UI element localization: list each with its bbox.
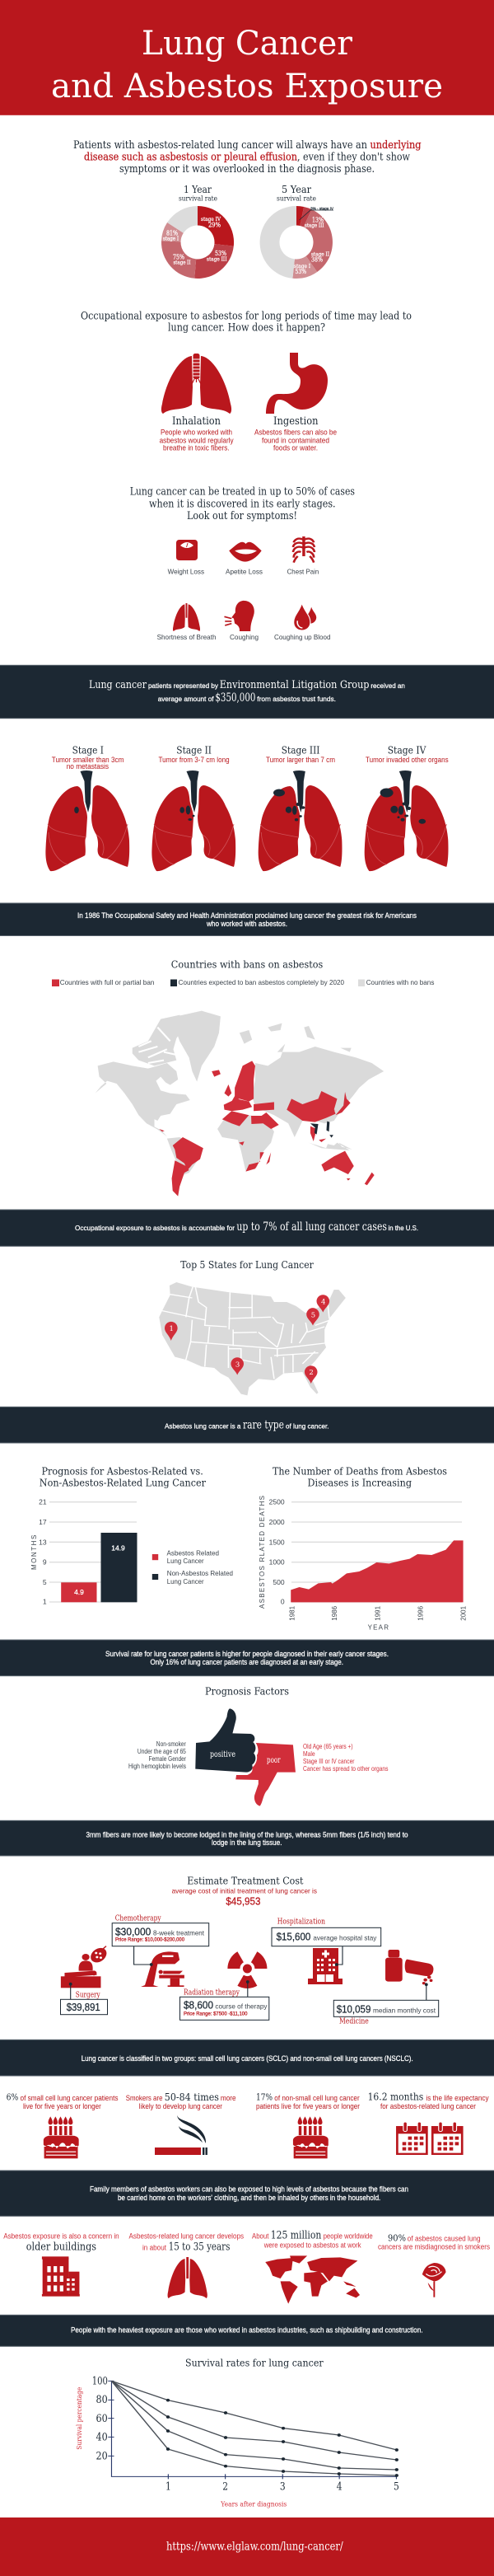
line chart: survival rates: 5 xyxy=(394,2481,399,2494)
donut chart: 1 year survival: survival rate xyxy=(179,194,217,203)
band: settlement callout: from asbestos trust funds. xyxy=(257,695,336,703)
text block: ingestion: found in contaminated xyxy=(262,437,329,446)
donut chart: 5 year survival: 5 Year xyxy=(282,183,311,195)
area chart: asbestos deaths: 2000 xyxy=(269,1518,285,1526)
cost: radiation therapy: Price Range: $7500 -$11,100 xyxy=(184,2012,248,2017)
band: rare type callout xyxy=(0,1407,494,1443)
text block: ingestion: Asbestos fibers can also be xyxy=(254,429,337,438)
area chart: asbestos deaths: YEAR xyxy=(368,1624,389,1632)
line chart: survival rates: 3 xyxy=(280,2481,286,2494)
panel: stage II xyxy=(151,744,235,871)
line chart: survival rates: Survival percentage xyxy=(76,2387,84,2450)
icon: thumbs up positive xyxy=(195,1708,255,1773)
list: poor factors: Stage III or IV cancer xyxy=(303,1757,355,1765)
donut chart: 1 year survival: stage II xyxy=(173,260,191,266)
stat: 16.2 months xyxy=(368,2090,489,2155)
map pin 4 xyxy=(316,1295,329,1312)
line chart: survival rates: 40 xyxy=(96,2431,108,2444)
band: settlement callout: patients represented by xyxy=(148,681,219,690)
heading: survival rates: Survival rates for lung cancer xyxy=(185,2357,324,2369)
legend: map xyxy=(52,978,434,986)
bar: asbestos related: 4.9 xyxy=(74,1588,84,1596)
line chart: survival rates: 1 xyxy=(165,2481,171,2494)
panel: stage I: Stage I xyxy=(72,744,104,756)
heading: prognosis bar chart xyxy=(40,1464,206,1488)
donut chart: 1 year survival: 75% xyxy=(173,253,184,260)
panel: stage IV: Tumor invaded other organs xyxy=(366,756,449,764)
header banner xyxy=(0,0,494,115)
band: heaviest exposure callout xyxy=(0,2315,494,2346)
cost: hospitalization: Hospitalization xyxy=(277,1917,325,1926)
list: poor factors: Cancer has spread to other organs xyxy=(303,1764,389,1773)
heading: deaths area chart xyxy=(273,1464,447,1488)
stat: older buildings xyxy=(3,2232,119,2297)
donut chart: 1 year survival: 1 Year xyxy=(184,183,212,195)
area chart: asbestos deaths xyxy=(259,1496,467,1632)
map pin 1 xyxy=(165,1322,178,1341)
list: positive factors: Under the age of 65 xyxy=(137,1747,186,1755)
stat: 15 to 35 years: Asbestos-related lung cancer develops xyxy=(128,2232,244,2241)
US map xyxy=(159,1282,346,1395)
band: heaviest exposure callout: People with the heaviest exposure are those who worked in asbestos industries, such as shipbuilding and construction. xyxy=(71,2326,423,2335)
line chart: survival rates: Years after diagnosis xyxy=(220,2500,287,2508)
area chart: asbestos deaths: ASBESTOS RLATED DEATHS xyxy=(259,1496,266,1609)
intro paragraph: symptoms or it was overlooked in the diagnosis phase. xyxy=(119,163,375,176)
band: fibers callout: lodge in the lung tissue. xyxy=(212,1838,282,1847)
panel: stage I: no metastasis xyxy=(67,762,109,770)
band: rare type callout: Asbestos lung cancer is a xyxy=(165,1422,241,1431)
cost: surgery: Surgery xyxy=(76,1990,100,1999)
icon: thumbs up positive: positive xyxy=(210,1749,235,1759)
stat: 15 to 35 years xyxy=(128,2232,244,2298)
intro paragraph: , even if they don't show xyxy=(297,152,410,163)
heading: prognosis bar chart: Prognosis for Asbestos-Related vs. xyxy=(41,1464,203,1477)
heading: occupational exposure: lung cancer. How does it happen? xyxy=(168,322,325,335)
area chart: asbestos deaths: 0 xyxy=(281,1598,285,1606)
band: survival callout: Only 16% of lung cancer patients are diagnosed at an early stage. xyxy=(150,1658,343,1666)
band: family exposure callout xyxy=(0,2171,494,2216)
stat: 125 million: were exposed to asbestos at work xyxy=(263,2241,361,2249)
bar: non-asbestos related: 14.9 xyxy=(111,1544,125,1553)
stat: 15 to 35 years: 15 to 35 years xyxy=(169,2241,230,2254)
bar chart: prognosis months: 17 xyxy=(39,1518,47,1526)
cost: surgery xyxy=(61,1946,110,2015)
area chart: asbestos deaths: 2500 xyxy=(269,1498,285,1506)
list: poor factors xyxy=(303,1742,389,1773)
area chart: asbestos deaths: 1981 xyxy=(288,1606,296,1621)
band: classification callout xyxy=(0,2040,494,2076)
cost: radiation therapy: course of therapy xyxy=(215,2002,268,2010)
stat: smokers: more xyxy=(221,2094,236,2102)
icon: coughing head xyxy=(224,601,259,641)
legend: map: Countries with no bans xyxy=(366,978,434,986)
stat: 6 percent: 6% xyxy=(7,2091,18,2103)
heading: symptoms: Lung cancer can be treated in up to 50% of cases xyxy=(130,486,355,499)
stat: 17 percent xyxy=(256,2091,360,2158)
text block: inhalation: asbestos would regularly xyxy=(160,437,234,446)
heading: prognosis bar chart: Non-Asbestos-Related Lung Cancer xyxy=(40,1476,206,1488)
cost: medicine: median monthly cost xyxy=(373,2006,436,2014)
stat: smokers xyxy=(126,2091,236,2155)
heading: treatment cost: Estimate Treatment Cost xyxy=(187,1875,303,1887)
area chart: asbestos deaths: 2001 xyxy=(459,1606,467,1621)
band: OSHA 1986 callout xyxy=(0,903,494,936)
map pin 5 xyxy=(306,1308,319,1325)
cost: medicine: Medicine xyxy=(339,2016,369,2026)
icon: medicine bottles xyxy=(385,1950,433,1984)
donut chart: 5 year survival: stage III xyxy=(305,222,324,229)
cost: chemotherapy xyxy=(112,1913,209,1987)
area chart: asbestos deaths: 500 xyxy=(273,1578,285,1586)
list: poor factors: Male xyxy=(303,1749,315,1758)
band: family exposure callout: Family members of asbestos workers can also be exposed to high levels of asbestos because the fibers can xyxy=(90,2185,408,2194)
band: settlement callout: average amount of xyxy=(158,695,214,703)
band: settlement callout: Environmental Litigation Group xyxy=(220,679,369,691)
title: Lung Cancer xyxy=(142,25,353,63)
line chart: survival rates: 2 xyxy=(222,2481,228,2494)
line chart: survival rates: 4 xyxy=(337,2481,343,2494)
heading: treatment cost: $45,953 xyxy=(226,1895,260,1907)
map pin 2 xyxy=(305,1365,318,1384)
stat: 125 million: 125 million xyxy=(271,2230,322,2242)
map pin 5: 5 xyxy=(311,1311,315,1319)
band: rare type callout: rare type xyxy=(243,1419,284,1432)
icon: shortness of breath lungs xyxy=(157,603,217,641)
stat: 17 percent: 17% xyxy=(256,2091,273,2103)
donut chart: 5 year survival: 53% xyxy=(295,268,306,275)
heading: treatment cost: average cost of initial treatment of lung cancer is xyxy=(172,1887,317,1895)
legend: prognosis: Non-Asbestos Related xyxy=(167,1569,233,1577)
bar chart: prognosis months: 13 xyxy=(39,1538,47,1546)
list: positive factors: Non-smoker xyxy=(156,1740,186,1748)
area chart: asbestos deaths: 1000 xyxy=(269,1558,285,1567)
heading: prognosis factors: Prognosis Factors xyxy=(205,1685,289,1698)
icon: coughing head: Coughing xyxy=(230,633,259,641)
bar chart: prognosis months: 5 xyxy=(43,1578,47,1586)
donut chart: 1 year survival xyxy=(161,183,234,279)
cost: hospitalization: $15,600 xyxy=(277,1931,310,1942)
icon: cake xyxy=(44,2116,79,2158)
intro paragraph: Patients with asbestos-related lung cancer will always have an xyxy=(73,139,368,152)
stat: older buildings: Asbestos exposure is also a concern in xyxy=(3,2232,119,2241)
stat: 6 percent: live for five years or longer xyxy=(23,2102,101,2110)
legend: map: Countries with full or partial ban xyxy=(60,978,155,986)
heading: deaths area chart: Diseases is Increasing xyxy=(308,1476,412,1488)
stat: smokers: 50-84 times xyxy=(165,2091,219,2103)
list: poor factors: Old Age (65 years +) xyxy=(303,1742,353,1750)
line chart: survival rates: 20 xyxy=(96,2451,108,2462)
icon: lungs xyxy=(168,2257,207,2298)
stat: smokers: Smokers are xyxy=(126,2094,163,2102)
donut chart: 5 year survival: stage II xyxy=(311,251,329,258)
map pin 3: 3 xyxy=(235,1361,240,1369)
band: OSHA 1986 callout: In 1986 The Occupational Safety and Health Administration proclaimed lung cancer the greatest risk for Americans xyxy=(77,911,417,920)
icon: shortness of breath lungs: Shortness of Breath xyxy=(157,633,217,641)
donut chart: 1 year survival: stage III xyxy=(207,256,227,263)
icon: rose xyxy=(422,2263,446,2297)
text block: inhalation: breathe in toxic fibers. xyxy=(163,444,230,453)
donut chart: 5 year survival: 13% xyxy=(312,216,324,224)
stat: 15 to 35 years: in about xyxy=(142,2244,166,2252)
stat: 17 percent: patients live for five years or longer xyxy=(256,2102,360,2110)
map pin 4: 4 xyxy=(321,1298,325,1306)
band: survival callout xyxy=(0,1640,494,1676)
stat: 90 percent: 90% xyxy=(388,2232,406,2243)
area chart: asbestos deaths: 1500 xyxy=(269,1538,285,1546)
heading: deaths area chart: The Number of Deaths from Asbestos xyxy=(273,1464,447,1477)
title: and Asbestos Exposure xyxy=(51,68,443,105)
band: 7 percent callout: in the U.S. xyxy=(389,1224,418,1232)
legend: prognosis: Lung Cancer xyxy=(167,1577,204,1585)
band: 7 percent callout: Occupational exposure to asbestos is accountable for xyxy=(75,1224,235,1232)
panel: stage IV xyxy=(365,744,449,871)
footer banner xyxy=(0,2517,494,2576)
band: 7 percent callout xyxy=(0,1210,494,1246)
cost: hospitalization xyxy=(272,1917,381,1984)
bar chart: prognosis months: 1 xyxy=(43,1598,47,1606)
stat: 16.2 months: is the life expectancy xyxy=(426,2094,489,2102)
icon: thumbs down poor: poor xyxy=(267,1755,281,1765)
donut chart: 5 year survival: stage I xyxy=(294,263,310,269)
stat: 125 million: people worldwide xyxy=(324,2232,373,2241)
bar chart: prognosis months: 9 xyxy=(43,1558,47,1567)
icon: thumbs down poor xyxy=(235,1743,296,1806)
band: OSHA 1986 callout: who worked with asbestos. xyxy=(206,920,287,928)
icon: stomach ingestion xyxy=(266,353,328,414)
icon: world map xyxy=(265,2255,360,2304)
intro paragraph: disease such as asbestosis or pleural effusion xyxy=(84,152,298,163)
stat: smokers: likely to develop lung cancer xyxy=(139,2102,222,2110)
cost: chemotherapy: Chemotherapy xyxy=(115,1913,161,1923)
cost: chemotherapy: 8-week treatment xyxy=(153,1929,205,1937)
cost: medicine xyxy=(333,1950,439,2026)
icon: calendars xyxy=(396,2122,464,2155)
band: 7 percent callout: up to 7% of all lung cancer cases xyxy=(236,1220,387,1234)
legend: prognosis xyxy=(152,1549,233,1585)
band: fibers callout: 3mm fibers are more likely to become lodged in the lining of the lungs, whereas 5mm fibers (1/5 inch) tend to xyxy=(86,1831,408,1839)
icon: hospital xyxy=(308,1948,343,1984)
text block: ingestion: Ingestion xyxy=(273,415,319,428)
panel: stage III: Tumor larger than 7 cm xyxy=(266,756,335,764)
band: settlement callout xyxy=(0,665,494,719)
bar chart: prognosis months: 21 xyxy=(39,1498,47,1506)
heading: treatment cost xyxy=(172,1875,317,1907)
cost: hospitalization: average hospital stay xyxy=(313,1933,377,1941)
cost: radiation therapy xyxy=(179,1951,269,2020)
stat: 125 million xyxy=(252,2230,373,2304)
heading: occupational exposure xyxy=(81,311,412,335)
icon: coughing blood drops xyxy=(274,603,331,641)
cost: radiation therapy: $8,600 xyxy=(184,1999,213,2011)
donut chart: 5 year survival: survival rate xyxy=(277,194,316,203)
legend: prognosis: Lung Cancer xyxy=(167,1557,204,1565)
text block: inhalation xyxy=(160,415,234,453)
donut chart: 1 year survival: 81% xyxy=(166,230,178,237)
cost: medicine: $10,059 xyxy=(337,2003,370,2015)
text block: inhalation: People who worked with xyxy=(161,429,232,438)
icon: appetite loss lips: Apetite Loss xyxy=(226,568,263,576)
heading: symptoms xyxy=(130,486,355,522)
band: rare type callout: of lung cancer. xyxy=(286,1422,329,1431)
band: family exposure callout: be carried home on the workers' clothing, and then be inhaled by others in the household. xyxy=(118,2194,380,2202)
donut chart: 5 year survival: 38% xyxy=(311,255,323,263)
intro paragraph xyxy=(73,139,422,176)
icon: lungs inhalation xyxy=(161,354,231,414)
icon: chest pain ribs xyxy=(287,536,319,576)
panel: stage II: Tumor from 3-7 cm long xyxy=(158,756,230,764)
heading: symptoms: when it is discovered in its early stages. xyxy=(149,499,336,511)
line chart: survival rates: 80 xyxy=(96,2394,108,2406)
stat: older buildings: older buildings xyxy=(26,2241,96,2254)
title xyxy=(51,25,443,105)
heading: symptoms: Look out for symptoms! xyxy=(187,510,297,522)
line chart: survival rates xyxy=(76,2375,399,2508)
cost: chemotherapy: Price Range: $10,000-$200,000 xyxy=(115,1938,185,1943)
stat: 6 percent xyxy=(7,2091,119,2158)
donut chart: 1 year survival: 29% xyxy=(208,221,221,229)
donut chart: 5 year survival xyxy=(260,183,334,279)
legend: map: Countries expected to ban asbestos completely by 2020 xyxy=(179,978,344,986)
band: settlement callout: Lung cancer xyxy=(89,679,147,691)
area chart: asbestos deaths: 1986 xyxy=(330,1606,338,1621)
panel: stage I: Tumor smaller than 3cm xyxy=(52,756,124,764)
icon: coughing blood drops: Coughing up Blood xyxy=(274,633,331,641)
map pin 1: 1 xyxy=(170,1325,174,1333)
icon: chest pain ribs: Chest Pain xyxy=(287,568,319,576)
cost: radiation therapy: Radiation therapy xyxy=(184,1988,240,1997)
icon: building xyxy=(42,2256,80,2297)
list: positive factors: Female Gender xyxy=(149,1754,186,1763)
heading: countries with bans: Countries with bans on asbestos xyxy=(171,958,323,971)
panel: stage III xyxy=(259,744,342,871)
band: classification callout: Lung cancer is classified in two groups: small cell lung cancers (SCLC) and non-small cell lung cancers (NSCLC). xyxy=(82,2054,413,2063)
band: survival callout: Survival rate for lung cancer patients is higher for people diagnosed in their early cancer stages. xyxy=(105,1650,389,1658)
donut chart: 5 year survival: 3% - stage IV xyxy=(310,206,334,211)
cost: chemotherapy: $30,000 xyxy=(115,1927,151,1938)
list: positive factors: High hemoglobin levels xyxy=(128,1762,186,1770)
band: settlement callout: received an xyxy=(370,681,405,690)
map pin 2: 2 xyxy=(309,1369,314,1377)
stat: 16.2 months: 16.2 months xyxy=(368,2090,423,2103)
icon: weight loss scale: Weight Loss xyxy=(168,568,204,576)
icon: cigarette xyxy=(155,2115,207,2155)
heading: top 5 states: Top 5 States for Lung Cancer xyxy=(180,1258,314,1271)
stat: 90 percent xyxy=(378,2232,490,2297)
line chart: survival rates: 100 xyxy=(92,2375,108,2387)
donut chart: 1 year survival: 53% xyxy=(215,250,226,257)
bar chart: prognosis months xyxy=(30,1498,137,1606)
footer banner: https://www.elglaw.com/lung-cancer/ xyxy=(166,2540,343,2553)
heading: occupational exposure: Occupational exposure to asbestos for long periods of time may lead to xyxy=(81,311,412,323)
donut chart: 1 year survival: stage I xyxy=(163,236,179,242)
world map: asbestos bans xyxy=(96,1011,384,1197)
panel: stage III: Stage III xyxy=(282,744,320,756)
icon: weight loss scale xyxy=(168,540,204,576)
stat: 17 percent: of non-small cell lung cancer xyxy=(274,2094,360,2102)
bar chart: prognosis months: MONTHS xyxy=(30,1535,38,1570)
panel: stage IV: Stage IV xyxy=(388,744,426,756)
panel: stage I xyxy=(45,744,129,871)
band: fibers callout xyxy=(0,1820,494,1856)
text block: ingestion xyxy=(254,415,337,453)
stat: 16.2 months: for asbestos-related lung cancer xyxy=(380,2102,476,2110)
stat: 90 percent: of asbestos caused lung xyxy=(408,2235,481,2243)
list: positive factors xyxy=(128,1740,186,1770)
band: settlement callout: $350,000 xyxy=(215,691,255,705)
donut chart: 1 year survival: stage IV xyxy=(201,216,221,222)
icon: radiation xyxy=(227,1951,267,1988)
icon: cake xyxy=(293,2116,329,2158)
cost: surgery: $39,891 xyxy=(67,2002,100,2013)
area chart: asbestos deaths: 1991 xyxy=(373,1606,381,1621)
area chart: asbestos deaths: 1996 xyxy=(416,1606,424,1621)
icon: appetite loss lips xyxy=(226,542,263,576)
stat: 125 million: About xyxy=(252,2232,269,2241)
icon: treatment machine xyxy=(141,1951,184,1987)
stat: 6 percent: of small cell lung cancer patients xyxy=(20,2094,119,2102)
text block: inhalation: Inhalation xyxy=(172,415,221,428)
intro paragraph: underlying xyxy=(370,139,422,152)
map pin 3 xyxy=(231,1357,244,1375)
panel: stage II: Stage II xyxy=(176,744,212,756)
text block: ingestion: foods or water. xyxy=(273,444,318,453)
legend: prognosis: Asbestos Related xyxy=(166,1549,219,1557)
icon: surgery xyxy=(61,1946,110,1988)
line chart: survival rates: 60 xyxy=(96,2413,108,2425)
